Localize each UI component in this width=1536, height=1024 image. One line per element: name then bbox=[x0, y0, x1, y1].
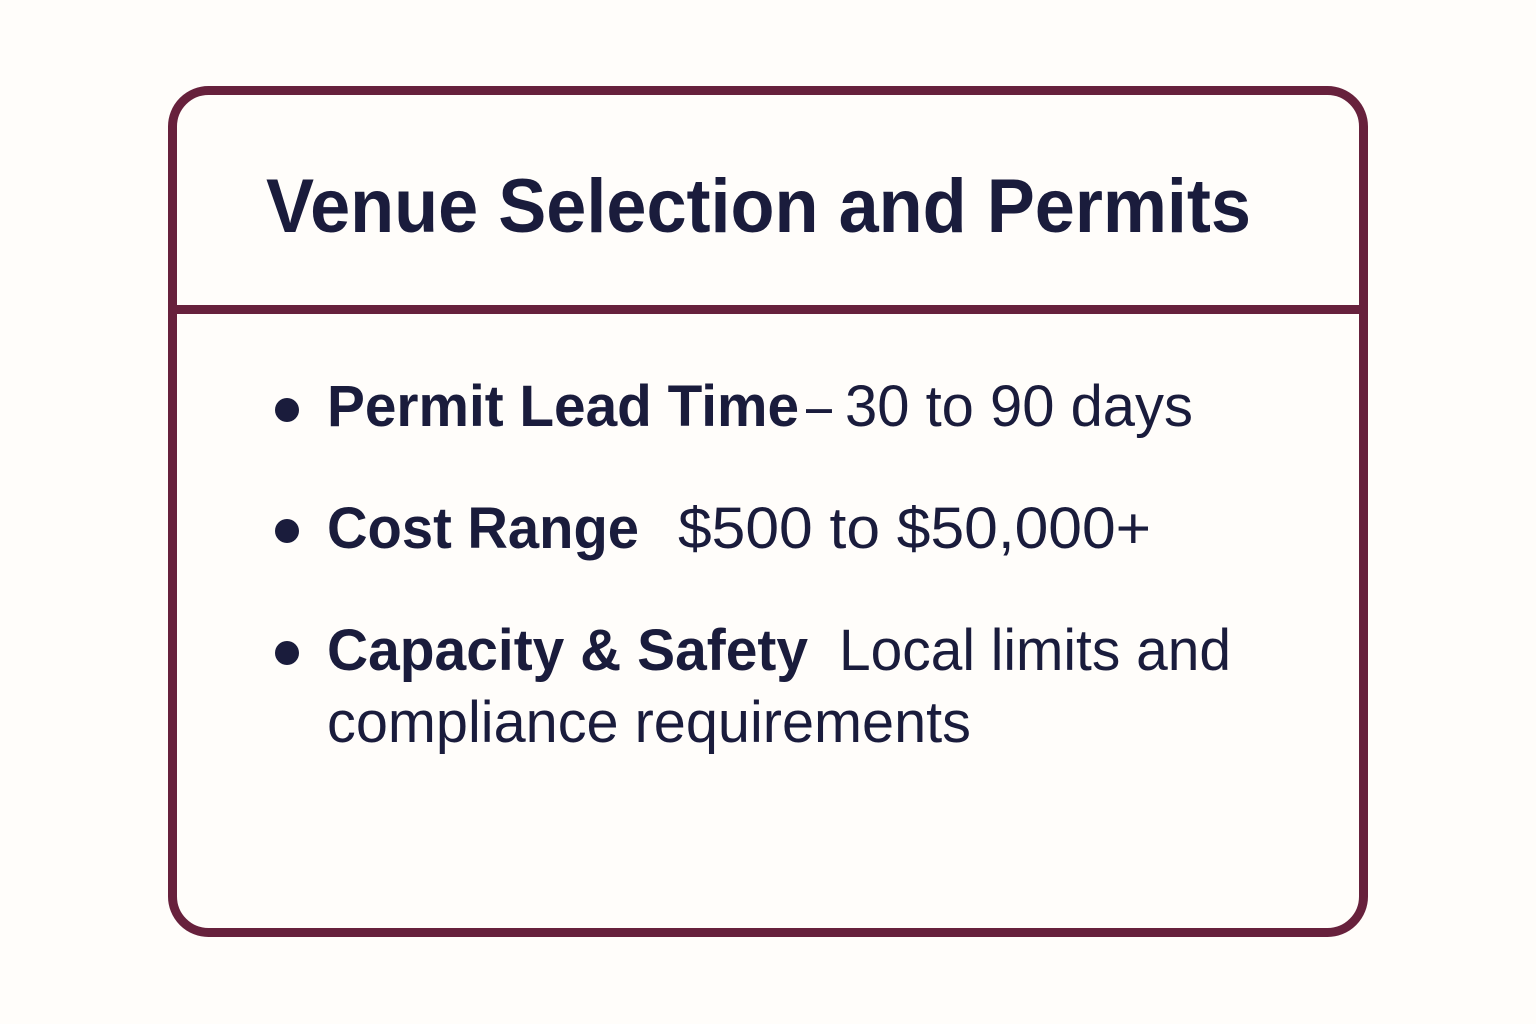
list item: cost range bbox=[275, 496, 1151, 561]
label: capacity and safety: Capacity & Safety bbox=[327, 618, 808, 683]
list item: permit lead time bbox=[275, 374, 1193, 439]
icon: bullet bbox=[275, 519, 299, 543]
icon: bullet bbox=[275, 641, 299, 665]
icon: bullet bbox=[275, 398, 299, 422]
value: 30 to 90 days: 30 to 90 days bbox=[845, 374, 1193, 439]
list item: capacity and safety bbox=[275, 618, 1231, 755]
label: permit lead time: Permit Lead Time bbox=[327, 374, 799, 439]
panel: venue card bbox=[172, 90, 1364, 932]
heading: Venue Selection and Permits bbox=[266, 164, 1251, 249]
value: local limits: Local limits and bbox=[839, 618, 1231, 683]
dash separator: – bbox=[806, 374, 833, 439]
label: cost range: Cost Range bbox=[327, 496, 639, 561]
value: compliance requirements: compliance requirements bbox=[327, 690, 971, 755]
value: cost amounts: $500 to $50,000+ bbox=[678, 496, 1151, 561]
